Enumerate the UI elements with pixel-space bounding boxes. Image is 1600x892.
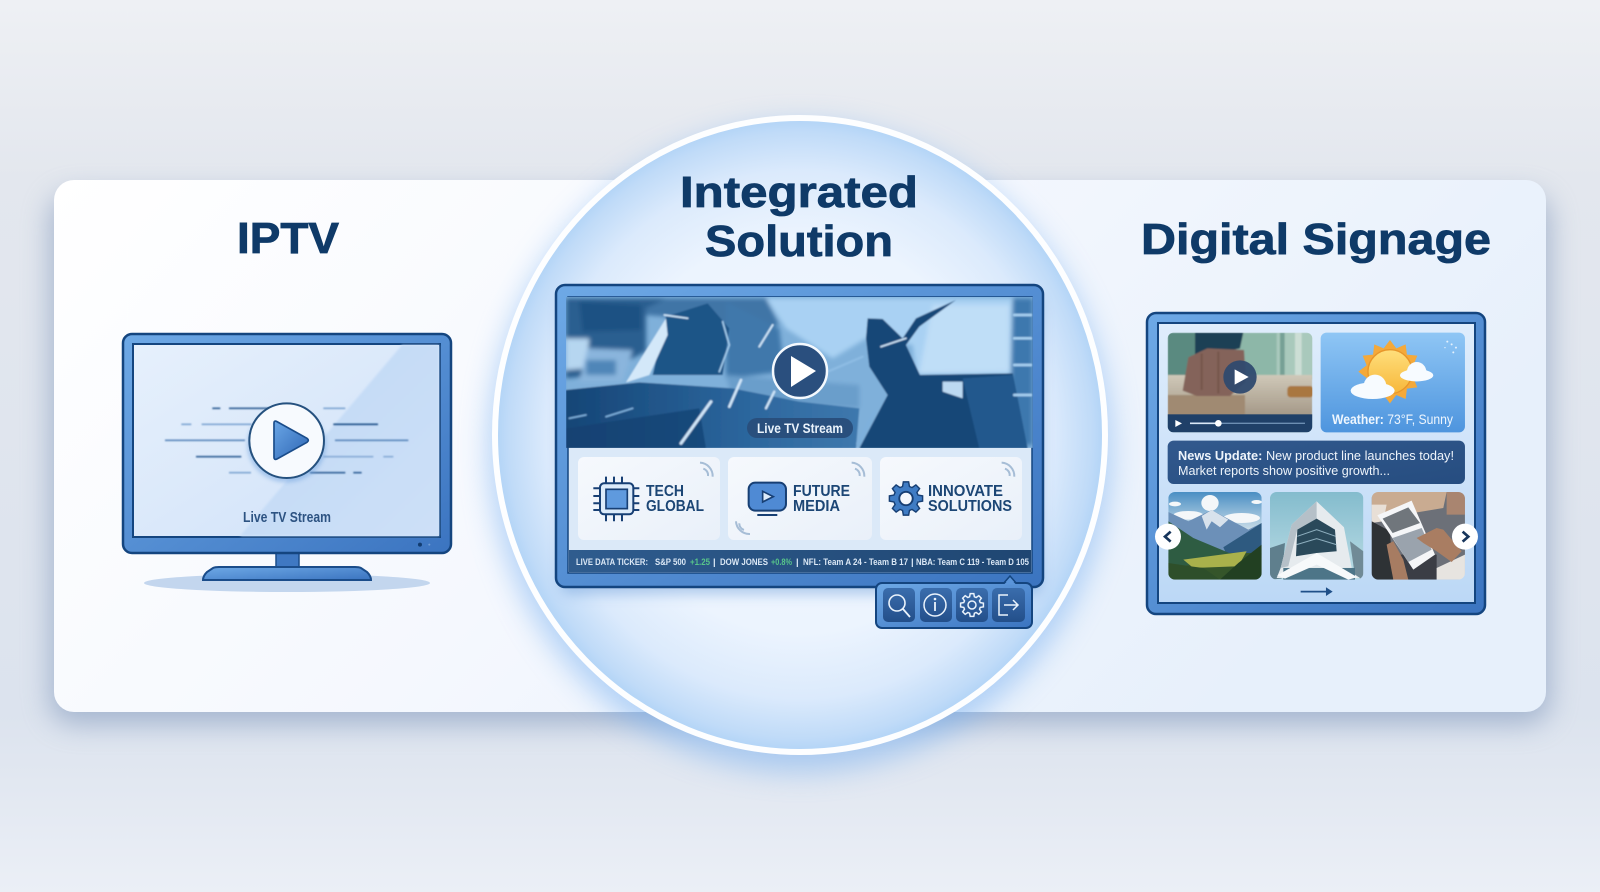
panel: IPTV <box>123 214 451 592</box>
control toolbar <box>876 576 1032 628</box>
panel: Integrated Solution spotlight <box>488 118 1112 772</box>
live data ticker: NBA: Team C 119 - Team D 105 <box>916 557 1030 568</box>
display shadow <box>560 295 1042 595</box>
shadow under stand <box>144 574 430 592</box>
live data ticker: | <box>911 557 914 568</box>
heading: Integrated Solution: Integrated <box>680 168 918 217</box>
photo: mountains <box>1168 492 1262 580</box>
stream label <box>747 418 853 438</box>
card: Innovate Solutions: SOLUTIONS <box>928 498 1012 515</box>
news text: News Update: New product line launches today! <box>1178 448 1454 463</box>
live data ticker: | <box>713 557 716 568</box>
stream label: Live TV Stream <box>757 420 843 436</box>
card: Innovate Solutions <box>880 457 1022 540</box>
clouds <box>1351 362 1433 399</box>
news text: Market reports show positive growth... <box>1178 463 1390 478</box>
carousel arrows <box>1155 524 1478 550</box>
stand <box>203 552 371 580</box>
photo: tablet in hands <box>1372 492 1465 580</box>
icon: screen play <box>736 463 864 534</box>
heading: IPTV: IPTV <box>237 214 340 263</box>
live data ticker <box>569 550 1031 572</box>
spotlight circle <box>495 118 1105 752</box>
weather tile <box>1321 333 1465 432</box>
display surface <box>1158 323 1475 603</box>
panel: Digital Signage <box>1141 215 1491 614</box>
live data ticker: NFL: Team A 24 - Team B 17 <box>803 557 908 568</box>
icon: gear <box>889 482 923 515</box>
live data ticker: DOW JONES <box>720 557 768 568</box>
search button <box>883 588 915 622</box>
live data ticker: +1.25 <box>690 557 711 568</box>
card: Future Media: MEDIA <box>793 498 840 515</box>
icon: chip <box>593 463 713 521</box>
live data ticker: +0.8% <box>771 557 792 568</box>
play button <box>247 408 326 482</box>
info button <box>920 588 952 622</box>
play button <box>773 344 827 398</box>
motion lines and play button, drawn in zoom coordinates <box>165 403 430 547</box>
live video scene <box>566 295 1036 448</box>
power lights <box>418 543 422 547</box>
news tile <box>1168 441 1465 484</box>
screen <box>133 344 440 537</box>
display surface <box>568 297 1032 573</box>
card: Innovate Solutions: INNOVATE <box>928 483 1003 500</box>
live data ticker: LIVE DATA TICKER: <box>576 557 648 568</box>
card: Future Media <box>728 457 872 540</box>
spotlight glow <box>488 124 1112 772</box>
card: Future Media: FUTURE <box>793 483 850 500</box>
pager arrow <box>1301 587 1333 596</box>
settings button <box>956 588 988 622</box>
photo: building <box>1270 492 1363 580</box>
card: Tech Global: GLOBAL <box>646 498 704 515</box>
heading: Digital Signage: Digital Signage <box>1141 215 1491 264</box>
television <box>123 334 451 592</box>
card: Tech Global: TECH <box>646 483 684 500</box>
weather caption: Weather: 73°F, Sunny <box>1332 412 1453 427</box>
exit button <box>992 588 1025 622</box>
card: Tech Global <box>578 457 720 540</box>
live data ticker: S&P 500 <box>655 557 686 568</box>
video play button <box>1223 360 1257 394</box>
video tile <box>1168 333 1313 432</box>
sun icon <box>1358 340 1422 403</box>
heading: Integrated Solution: Solution <box>705 217 893 266</box>
display frame <box>1147 313 1485 614</box>
panel: backing card <box>50 180 1550 724</box>
integrated display <box>556 285 1043 628</box>
video controls <box>1175 420 1182 427</box>
news text <box>1178 448 1454 478</box>
mountain, building and tablet photos <box>1168 492 1465 580</box>
speed lines <box>165 408 408 473</box>
bezel <box>123 334 451 553</box>
display frame <box>556 285 1043 587</box>
heading: Integrated Solution <box>680 168 918 266</box>
live data ticker: | <box>796 557 799 568</box>
sparkle dots <box>1444 341 1457 353</box>
caption: Live TV Stream <box>243 510 331 526</box>
signage display <box>1147 313 1485 614</box>
